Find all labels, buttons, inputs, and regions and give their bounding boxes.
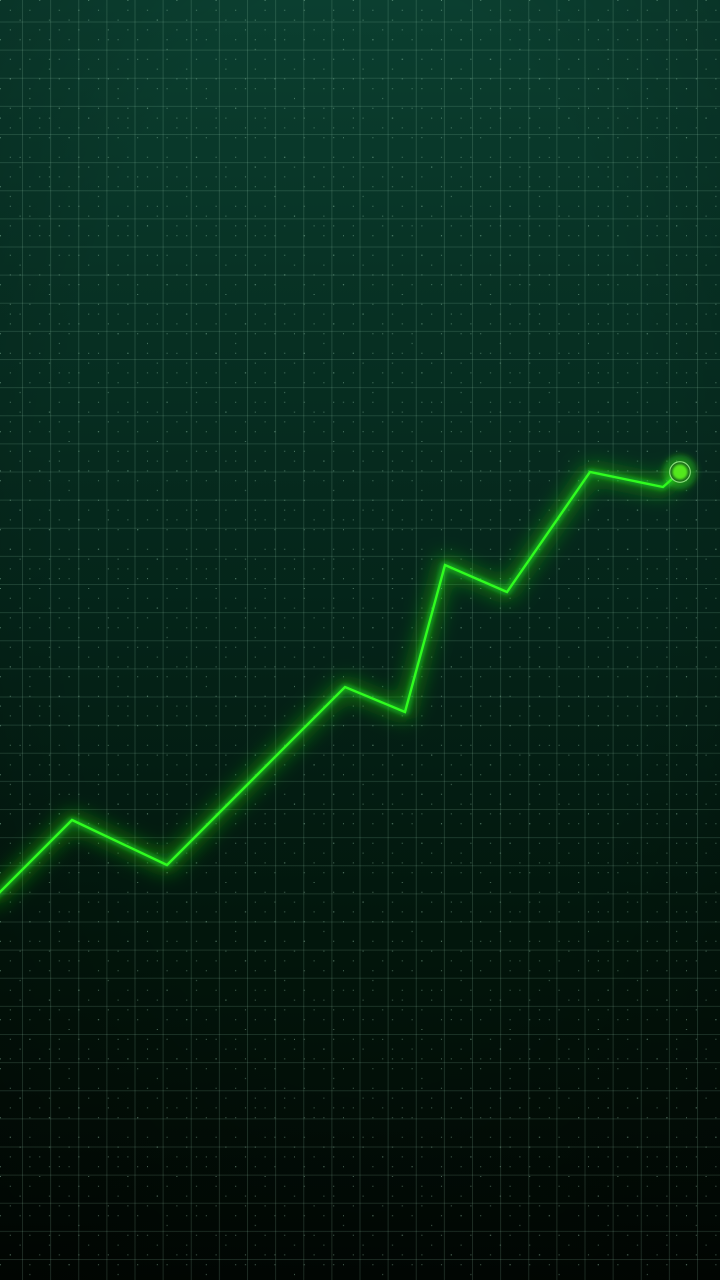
rising line with glow (0, 472, 680, 902)
end point marker (663, 455, 697, 489)
